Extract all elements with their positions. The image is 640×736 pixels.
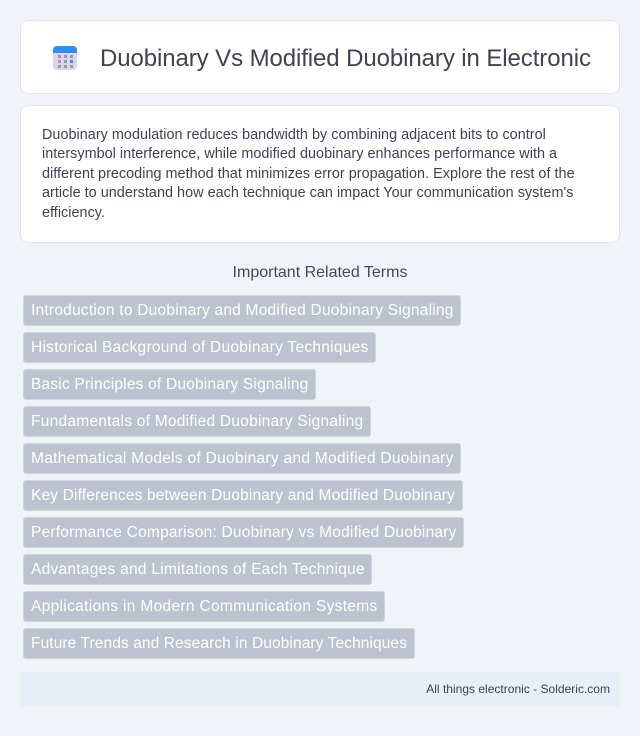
text: line 1: Duobinary modulation reduces bandwidth by combining adjacent bits to control [42,127,546,143]
tag: applications [23,591,385,622]
tag: introduction: Introduction to Duobinary and Modified Duobinary Signaling [31,302,454,319]
tag: historical background [23,332,376,363]
tag: mathematical models: Mathematical Models of Duobinary and Modified Duobinary [31,450,454,467]
tag: applications: Applications in Modern Communication Systems [31,598,378,615]
text: line 2: intersymbol interference, while modified duobinary enhances performance with a [42,146,557,162]
icon: calendar [53,46,77,70]
tag: historical background: Historical Background of Duobinary Techniques [31,339,369,356]
tag: basic principles: Basic Principles of Duobinary Signaling [31,376,308,393]
panel: introduction text [20,105,620,243]
panel: header [20,20,620,94]
text: line 5: efficiency. [42,205,105,221]
panel: related terms list [23,295,464,659]
tag: fundamentals: Fundamentals of Modified Duobinary Signaling [31,413,363,430]
tag: fundamentals [23,406,371,437]
tag: mathematical models [23,443,461,474]
title: Duobinary Vs Modified Duobinary in Electronic [100,45,591,72]
tag: advantages and limitations: Advantages and Limitations of Each Technique [31,561,365,578]
footer [20,672,620,706]
tag: performance comparison: Performance Comparison: Duobinary vs Modified Duobinary [31,524,457,541]
tag: key differences [23,480,463,511]
tag: introduction [23,295,461,326]
footer: All things electronic - Solderic.com [426,682,610,696]
text: line 4: article to understand how each technique can impact Your communication system's [42,185,573,201]
tag: key differences: Key Differences between Duobinary and Modified Duobinary [31,487,455,504]
tag: future trends [23,628,415,659]
tag: advantages and limitations [23,554,372,585]
text: line 3: different precoding method that minimizes error propagation. Explore the rest of the [42,166,575,182]
heading: related terms: Important Related Terms [233,264,407,281]
tag: performance comparison [23,517,464,548]
tag: future trends: Future Trends and Research in Duobinary Techniques [31,635,407,652]
tag: basic principles [23,369,316,400]
